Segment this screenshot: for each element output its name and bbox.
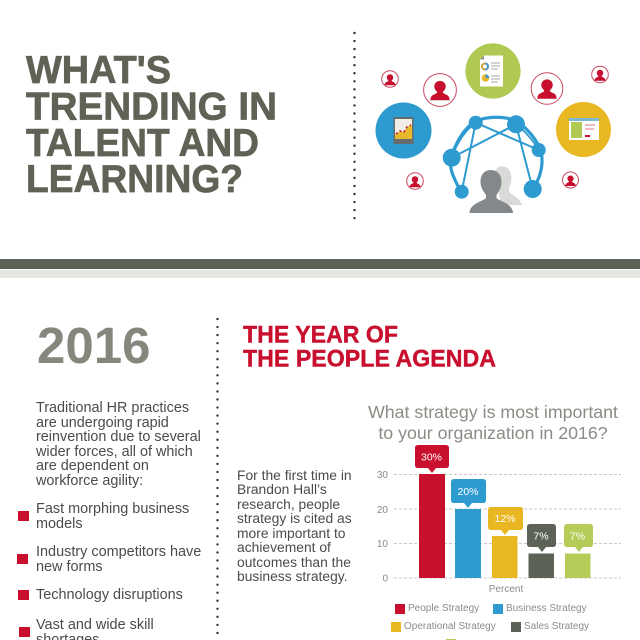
icon: green document circle bbox=[465, 43, 521, 99]
section heading: THE YEAR OF bbox=[243, 322, 398, 348]
bullet: competitors bbox=[17, 544, 201, 575]
axis labels: 10 bbox=[377, 539, 388, 550]
middle text: research, people bbox=[237, 496, 340, 512]
bar: other 7%: 7% bbox=[570, 530, 585, 542]
intro text: wider forces, all of which bbox=[36, 444, 193, 460]
bullet: skill shortages bbox=[19, 617, 154, 640]
section heading bbox=[243, 322, 496, 372]
bar: sales strategy 7% bbox=[527, 524, 556, 578]
axis labels: 30 bbox=[377, 470, 388, 481]
intro text: reinvention due to several bbox=[36, 429, 201, 445]
bullet: business models bbox=[18, 501, 189, 532]
axis labels: 20 bbox=[377, 505, 388, 516]
icon: grey people bbox=[470, 166, 522, 213]
divider band bbox=[0, 259, 640, 278]
axis labels bbox=[377, 470, 388, 584]
middle text: Brandon Hall’s bbox=[237, 481, 327, 497]
bullet: business models: models bbox=[36, 516, 83, 532]
intro text bbox=[36, 400, 201, 489]
bar: business strategy 20% bbox=[451, 479, 486, 578]
title: TALENT AND bbox=[26, 122, 259, 165]
bar: operational strategy 12% bbox=[488, 507, 523, 578]
axis grid bbox=[394, 474, 621, 578]
intro text: are undergoing rapid bbox=[36, 415, 169, 431]
bar: people strategy 30%: 30% bbox=[421, 452, 442, 464]
bar: operational strategy 12%: 12% bbox=[494, 513, 516, 525]
intro text: are dependent on bbox=[36, 458, 149, 474]
bar chart bbox=[377, 445, 621, 595]
icon: person badges bbox=[382, 66, 608, 189]
middle text bbox=[237, 467, 352, 584]
legend: operational strategy: Operational Strategy bbox=[404, 621, 496, 632]
bullet: competitors: new forms bbox=[36, 559, 103, 575]
bullet: competitors: Industry competitors have bbox=[36, 544, 201, 560]
bullet: business models: Fast morphing business bbox=[36, 501, 189, 517]
bar: other 7% bbox=[564, 524, 593, 578]
chart title: to your organization in 2016? bbox=[378, 422, 608, 442]
legend: people strategy: People Strategy bbox=[408, 603, 479, 614]
icon: yellow browser circle bbox=[556, 102, 611, 157]
legend bbox=[391, 603, 589, 640]
illustration: talent network bbox=[376, 43, 611, 213]
axis labels: 0 bbox=[382, 574, 388, 584]
legend: other swatch bbox=[446, 639, 456, 640]
title: WHAT'S bbox=[26, 50, 171, 92]
bar: people strategy 30% bbox=[415, 445, 449, 578]
title: LEARNING? bbox=[26, 158, 243, 200]
middle text: business strategy. bbox=[237, 568, 348, 584]
bullet: skill shortages: Vast and wide skill bbox=[36, 617, 154, 633]
bar: business strategy 20%: 20% bbox=[457, 486, 479, 498]
intro text: Traditional HR practices bbox=[36, 400, 189, 416]
title bbox=[26, 50, 277, 200]
year heading: 2016 bbox=[37, 317, 150, 374]
bullet: technology: Technology disruptions bbox=[36, 587, 183, 603]
legend: sales strategy: Sales Strategy bbox=[524, 621, 589, 632]
axis title: Percent bbox=[489, 584, 523, 595]
bar: sales strategy 7%: 7% bbox=[533, 530, 549, 542]
middle text: achievement of bbox=[237, 539, 331, 555]
legend: business strategy: Business Strategy bbox=[506, 603, 587, 614]
icon: network arc bbox=[443, 115, 546, 199]
chart title: What strategy is most important bbox=[368, 402, 618, 422]
bullet list bbox=[17, 501, 201, 640]
chart title bbox=[368, 402, 618, 442]
middle text: strategy is cited as bbox=[237, 510, 352, 526]
middle text: For the first time in bbox=[237, 467, 352, 483]
title: TRENDING IN bbox=[26, 86, 277, 128]
intro text: workforce agility: bbox=[36, 473, 143, 489]
middle text: more important to bbox=[237, 525, 346, 541]
middle text: outcomes than the bbox=[237, 554, 351, 570]
icon: blue tablet circle bbox=[376, 102, 432, 158]
